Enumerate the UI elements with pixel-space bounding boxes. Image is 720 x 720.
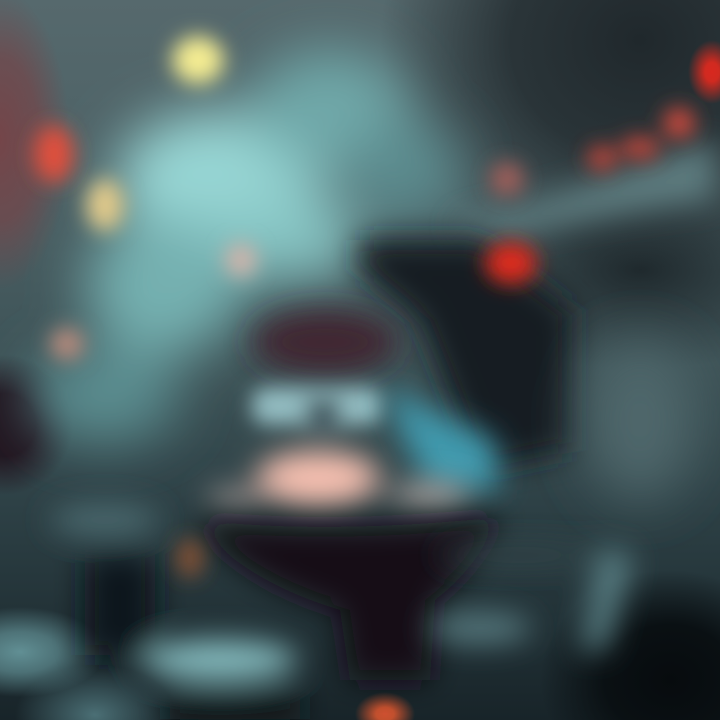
- red light left: [34, 125, 74, 183]
- teal cloud glow: [30, 50, 460, 443]
- dark bowl: [195, 517, 500, 680]
- red light string: [587, 107, 695, 171]
- blue shoulder: [385, 385, 500, 490]
- glowing pink light: [207, 450, 470, 507]
- yellow light: [172, 36, 224, 84]
- lower right shapes: [435, 545, 632, 650]
- lower left shapes: [50, 504, 532, 720]
- amber light: [86, 179, 124, 231]
- pale pink light: [225, 243, 257, 277]
- peach light: [50, 328, 84, 360]
- dark tower behind figure: [360, 240, 572, 470]
- red lamp on tower: [485, 242, 537, 284]
- ridge on right: [450, 140, 715, 240]
- faint red light: [490, 162, 524, 196]
- figure hat: [253, 310, 397, 374]
- figure face: [252, 387, 382, 436]
- right pale mist: [585, 340, 695, 500]
- dim orange light: [176, 538, 204, 578]
